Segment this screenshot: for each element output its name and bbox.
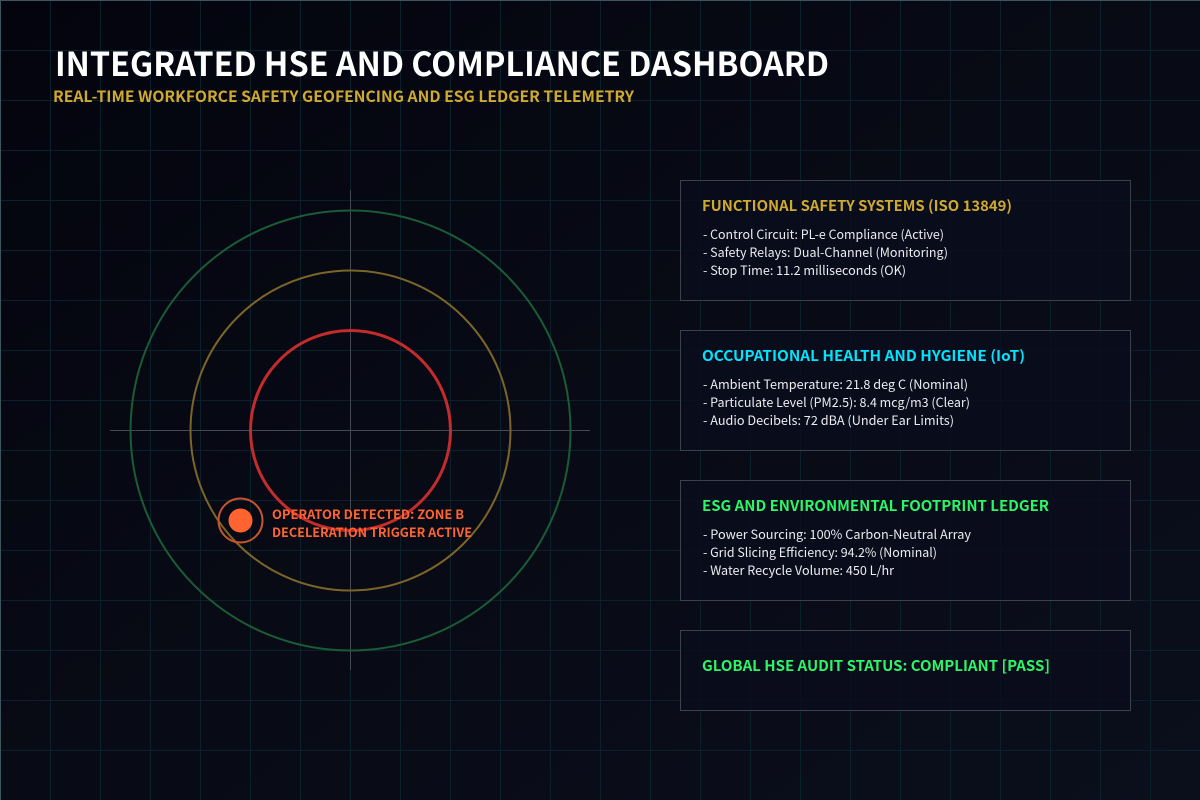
heading: ESG ledger: ESG AND ENVIRONMENTAL FOOTPRINT LEDGER bbox=[702, 495, 1049, 516]
list: functional safety: - Stop Time: 11.2 milliseconds (OK) bbox=[703, 260, 906, 279]
list: functional safety bbox=[703, 224, 948, 279]
status: audit pass: GLOBAL HSE AUDIT STATUS: COMPLIANT [PASS] bbox=[702, 655, 1050, 676]
panel: audit status bbox=[680, 630, 1130, 710]
operator alert label: DECELERATION TRIGGER ACTIVE bbox=[272, 522, 472, 541]
operator alert label bbox=[272, 504, 472, 541]
operator alert label: OPERATOR DETECTED: ZONE B bbox=[272, 504, 464, 523]
crosshair axes bbox=[110, 190, 590, 670]
inner red zone ring bbox=[250, 330, 450, 530]
geofence radar chart bbox=[110, 190, 590, 670]
panel: ESG ledger bbox=[680, 480, 1130, 600]
outer green zone ring bbox=[130, 210, 570, 650]
panel: functional safety bbox=[680, 180, 1130, 300]
list: ESG ledger: - Water Recycle Volume: 450 L/hr bbox=[703, 560, 894, 579]
list: occupational health bbox=[703, 374, 970, 429]
list: occupational health: - Particulate Level (PM2.5): 8.4 mcg/m3 (Clear) bbox=[703, 392, 970, 411]
heading: occupational health: OCCUPATIONAL HEALTH AND HYGIENE (IoT) bbox=[702, 345, 1025, 366]
title: INTEGRATED HSE AND COMPLIANCE DASHBOARD bbox=[55, 38, 829, 86]
subtitle: REAL-TIME WORKFORCE SAFETY GEOFENCING AND ESG LEDGER TELEMETRY bbox=[53, 85, 635, 107]
panel: occupational health bbox=[680, 330, 1130, 450]
list: ESG ledger bbox=[703, 524, 971, 579]
heading: functional safety: FUNCTIONAL SAFETY SYSTEMS (ISO 13849) bbox=[702, 195, 1012, 216]
list: occupational health: - Audio Decibels: 72 dBA (Under Ear Limits) bbox=[703, 410, 954, 429]
list: occupational health: - Ambient Temperature: 21.8 deg C (Nominal) bbox=[703, 374, 968, 393]
operator marker bbox=[218, 498, 262, 542]
list: functional safety: - Safety Relays: Dual-Channel (Monitoring) bbox=[703, 242, 948, 261]
list: functional safety: - Control Circuit: PL-e Compliance (Active) bbox=[703, 224, 944, 243]
list: ESG ledger: - Grid Slicing Efficiency: 94.2% (Nominal) bbox=[703, 542, 937, 561]
middle amber zone ring bbox=[190, 270, 510, 590]
list: ESG ledger: - Power Sourcing: 100% Carbon-Neutral Array bbox=[703, 524, 971, 543]
